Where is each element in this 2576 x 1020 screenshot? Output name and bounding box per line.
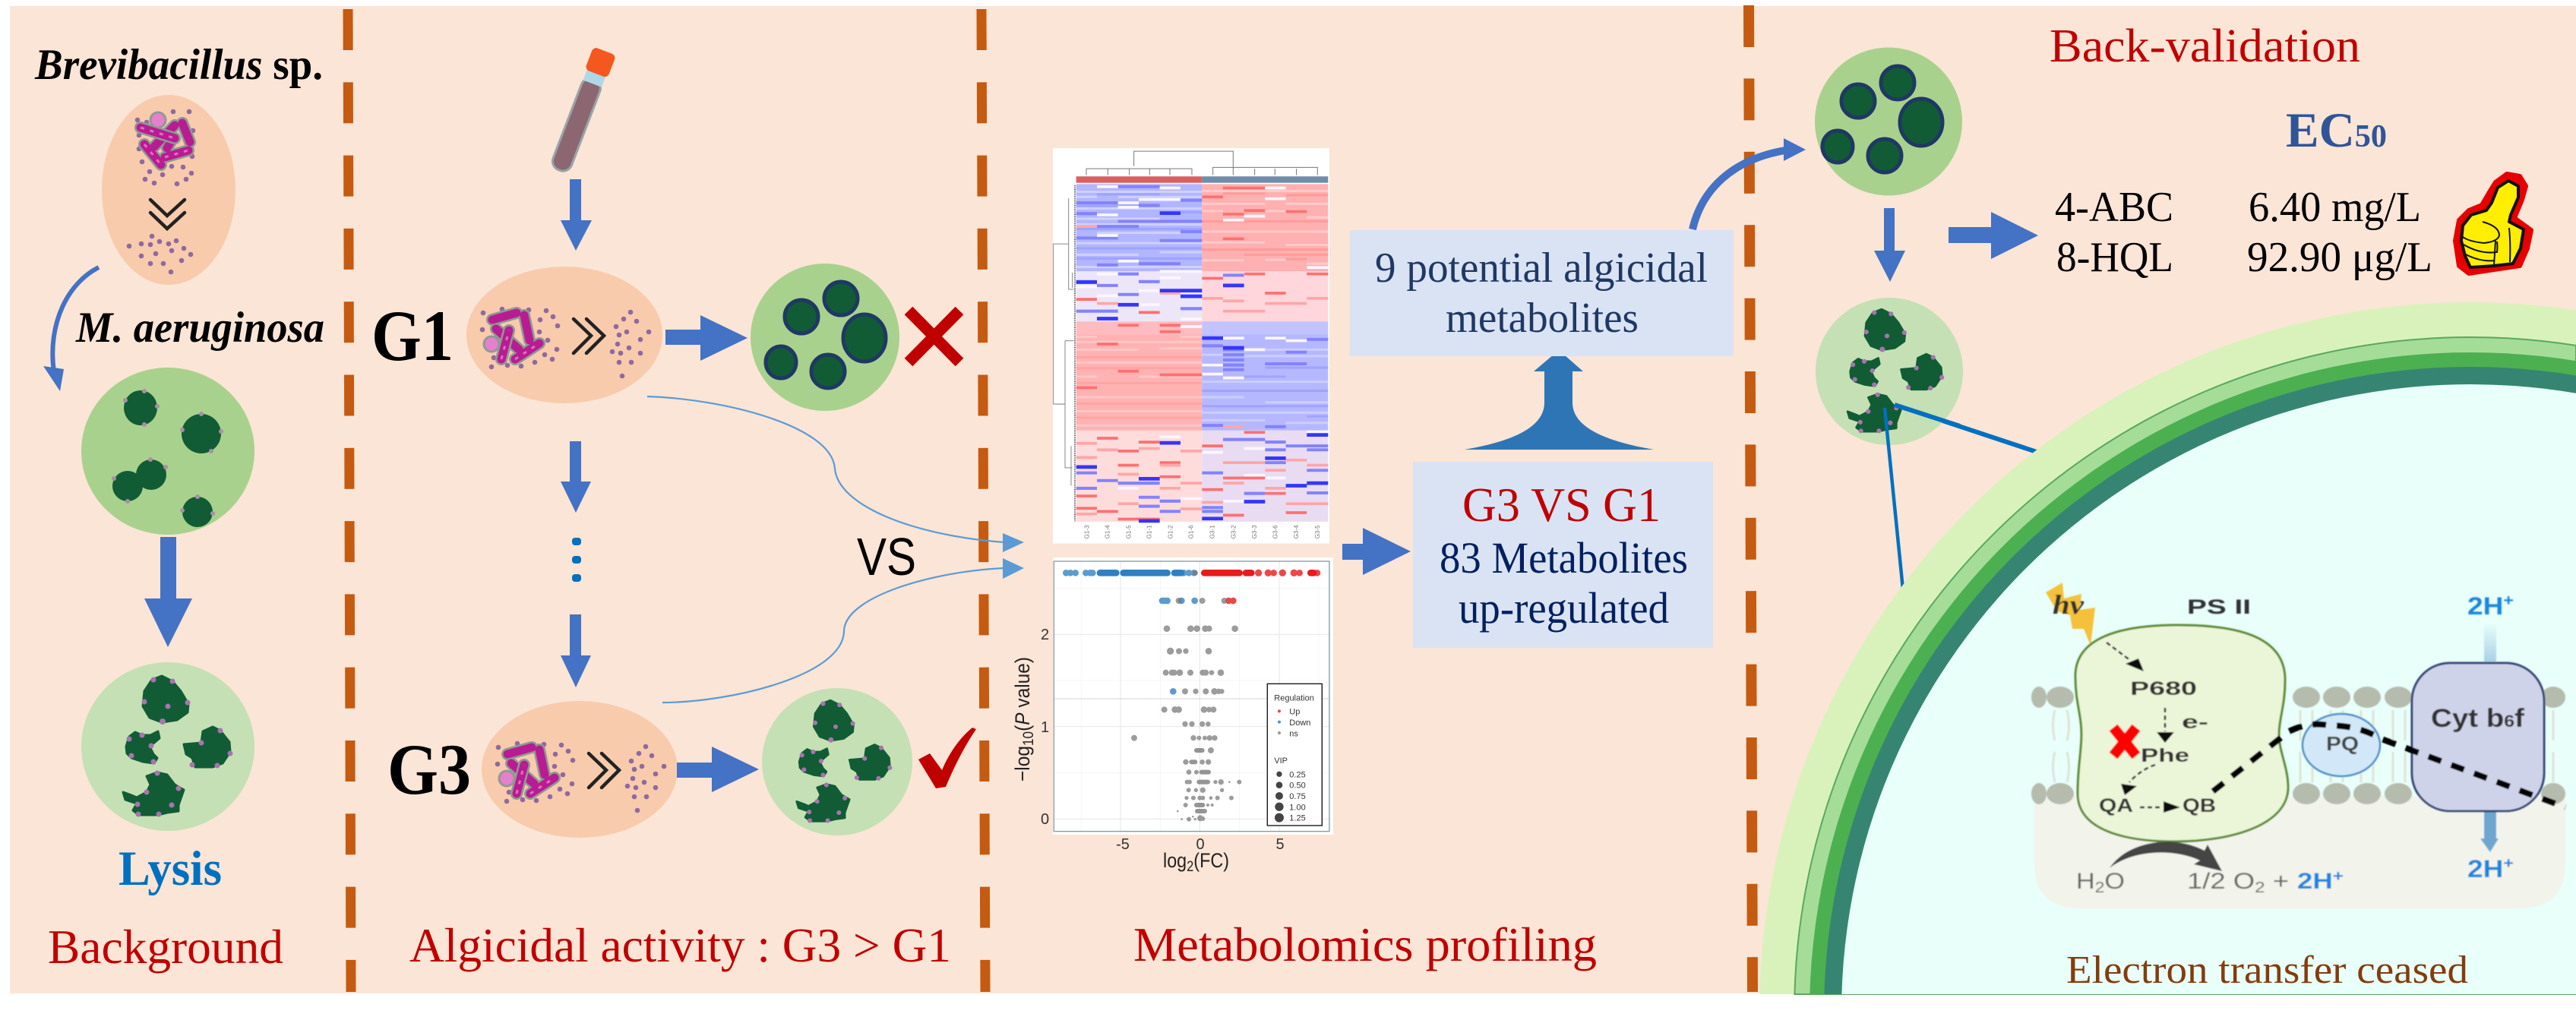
chart: volcano plot: -5 <box>1116 836 1130 853</box>
icon: healthy algae culture <box>81 368 254 535</box>
box: G3 VS G1 <box>1413 462 1713 648</box>
icon: treated culture top <box>1815 47 1962 196</box>
chart: volcano plot: log <box>1163 849 1190 872</box>
chart: volcano plot: 2 <box>1187 859 1193 875</box>
box: 9 potential algicidal metabolites: 9 potential algicidal <box>1375 245 1708 292</box>
arrow: G1 downward <box>561 441 591 513</box>
ellipsis dots <box>572 538 581 582</box>
title: Metabolomics profiling: Metabolomics profiling <box>1133 917 1597 971</box>
icon: G1 result culture <box>751 264 899 411</box>
title: Background: Background <box>48 920 283 974</box>
chart: volcano plot: 10 <box>1021 731 1037 746</box>
legend: ns <box>1289 729 1298 738</box>
arrow: tube to G1 <box>561 179 592 251</box>
icon: G1 ellipse with bacteria <box>466 267 662 403</box>
connector lines to zoomed cell <box>1885 405 2043 589</box>
labels inside PS II: P680 <box>2130 678 2197 699</box>
label: half O2: 1/2 O <box>2187 869 2243 894</box>
lightning bolt <box>2046 583 2095 646</box>
label: PS II: PS II <box>2187 595 2251 618</box>
legend <box>1267 684 1322 826</box>
chart: heatmap <box>1053 148 1329 544</box>
panel: back-validation <box>1759 21 2576 994</box>
complex: PQ: PQ <box>2326 732 2359 755</box>
label: hv: hv <box>2053 589 2085 620</box>
arrow: right to EC50 <box>1949 212 2038 259</box>
arrow: curved to back-validation <box>1693 138 1806 229</box>
chart: volcano plot: 2 <box>1041 627 1049 643</box>
legend: Up <box>1289 708 1300 717</box>
box: G3 VS G1: 83 Metabolites <box>1440 533 1688 583</box>
box: G3 VS G1: up-regulated <box>1459 583 1669 633</box>
box: 9 potential algicidal metabolites <box>1350 230 1734 356</box>
label: half O2: + <box>2265 869 2289 894</box>
legend: 0.25 <box>1289 770 1306 779</box>
legend: Down <box>1289 718 1310 728</box>
chart: volcano plot: 5 <box>1275 836 1285 853</box>
thick dashed electron path <box>2213 725 2565 807</box>
label: H2O: 2 <box>2095 879 2104 896</box>
legend: Regulation <box>1274 693 1314 703</box>
arrow: proton transfer <box>2480 623 2499 852</box>
icon: thumbs up <box>2455 174 2531 273</box>
arrow: down between cultures <box>1874 208 1905 282</box>
chart: heatmap: G3-5 <box>1314 525 1321 538</box>
panel: background <box>34 41 324 974</box>
label: half O2: 2 <box>2255 879 2265 896</box>
complex: Cyt b6f <box>2412 663 2544 811</box>
chart: volcano plot <box>1011 557 1333 875</box>
icon: G3 ellipse with bacteria <box>482 701 678 838</box>
arrow: plots to G3 VS G1 box <box>1342 528 1411 575</box>
title: Algicidal activity: Algicidal activity : G3 > G1 <box>409 918 951 972</box>
chart: volcano plot: ( <box>1011 725 1034 731</box>
label: H2O: H <box>2076 869 2093 894</box>
label: VS: VS <box>857 527 916 586</box>
proton labels: 2H <box>2467 855 2499 883</box>
chart: heatmap: G1-6 <box>1188 525 1195 538</box>
small dashed arrows <box>2107 643 2165 807</box>
panel: metabolomics profiling <box>1011 138 1806 971</box>
stroma region <box>2034 796 2565 908</box>
chart: heatmap: G3-1 <box>1209 525 1216 538</box>
chart: heatmap: G1-5 <box>1125 525 1132 538</box>
dashed divider 3 <box>1749 5 1753 992</box>
icon: lysed culture right <box>1816 298 1963 446</box>
arrow: water splitting <box>2110 842 2222 871</box>
connector: G1 curve to plots <box>647 396 1024 552</box>
chart: volcano plot: 0 <box>1196 836 1205 853</box>
labels inside PS II: e- <box>2182 712 2208 733</box>
chart: heatmap: G1-1 <box>1146 525 1153 538</box>
complex: PQ <box>2303 714 2380 776</box>
heading: M. aeruginosa: M. aeruginosa <box>75 304 324 352</box>
chart: heatmap: G3-2 <box>1230 525 1237 538</box>
labels inside PS II <box>2099 678 2216 816</box>
label: H2O: O <box>2104 869 2125 894</box>
icon: lysed algae culture <box>81 662 254 831</box>
icon: red cross <box>909 311 959 362</box>
cell: enlarged cell membrane <box>1759 302 2576 994</box>
table: EC50 values: 6.40 mg/L <box>2249 184 2421 231</box>
arrow: G3 to result <box>677 747 759 792</box>
heading: EC50: EC50 <box>2286 103 2387 158</box>
chart: heatmap: G3-3 <box>1251 525 1258 538</box>
heading: Brevibacillus sp.: Brevibacillus sp. <box>34 41 323 89</box>
labels inside PS II: Phe <box>2141 745 2189 766</box>
chart: volcano plot: P value) <box>1011 651 1034 725</box>
chart: volcano plot: 0 <box>1041 811 1049 828</box>
chart: heatmap: G1-3 <box>1083 525 1090 538</box>
dashed divider 2 <box>981 9 985 992</box>
arrow: flared up arrow <box>1465 350 1654 450</box>
label: 2H+ product: 2H <box>2297 869 2326 894</box>
title: Back-validation: Back-validation <box>2050 21 2360 72</box>
chart: heatmap: G1-2 <box>1167 525 1174 538</box>
complex: Cyt b6f: Cyt b 6f <box>2431 704 2525 733</box>
proton labels: + <box>2503 592 2514 609</box>
table: EC50 values: 4-ABC <box>2055 184 2173 231</box>
diagram: photosystem II electron chain <box>2031 583 2565 908</box>
lipid bilayer <box>2031 687 2565 804</box>
labels inside PS II: QA <box>2099 795 2133 816</box>
arrow: G1 to result <box>665 315 748 361</box>
chart: volcano plot: (FC) <box>1193 849 1229 872</box>
legend: 0.75 <box>1289 792 1306 801</box>
dashed divider 1 <box>348 9 351 992</box>
connector: G3 curve to plots <box>662 558 1024 703</box>
table: EC50 values: 8-HQL <box>2056 234 2173 281</box>
chart: volcano plot: 1 <box>1041 719 1049 736</box>
chart: heatmap: G1-4 <box>1105 525 1111 538</box>
panel: algicidal activity <box>371 46 1024 972</box>
legend: 0.50 <box>1289 782 1306 791</box>
chart: heatmap: G3-4 <box>1293 525 1300 538</box>
proton labels: 2H <box>2467 592 2499 620</box>
labels inside PS II: QB <box>2182 795 2216 816</box>
icon: red check <box>918 728 976 788</box>
chart: heatmap: G3-6 <box>1272 525 1279 538</box>
arrow: big down arrow <box>144 537 192 647</box>
legend: 1.25 <box>1289 814 1306 823</box>
red cross: inhibition <box>2113 728 2136 756</box>
icon: bacteria ellipse <box>102 95 235 285</box>
icon: G3 result culture <box>762 688 912 835</box>
arrow: curved to M. aeruginosa <box>43 267 99 391</box>
legend: 1.00 <box>1289 803 1306 812</box>
label: G3: G3 <box>387 729 471 810</box>
caption: Electron transfer ceased: Electron transfer ceased <box>2066 949 2468 992</box>
proton labels: + <box>2503 855 2514 872</box>
table: EC50 values <box>2055 184 2432 281</box>
box: G3 VS G1: G3 VS G1 <box>1462 478 1661 532</box>
arrow: to G3 <box>561 614 591 687</box>
legend: VIP <box>1274 756 1288 766</box>
table: EC50 values: 92.90 μg/L <box>2247 234 2432 281</box>
box: 9 potential algicidal metabolites: metabolites <box>1446 295 1639 342</box>
icon: test tube <box>548 46 616 175</box>
proton labels <box>2467 592 2514 883</box>
label: 2H+ product: + <box>2333 868 2344 885</box>
label: G1: G1 <box>371 295 454 376</box>
label: Lysis: Lysis <box>119 842 222 896</box>
complex: PS II <box>2075 625 2288 842</box>
chart: volcano plot: −log <box>1011 742 1034 782</box>
